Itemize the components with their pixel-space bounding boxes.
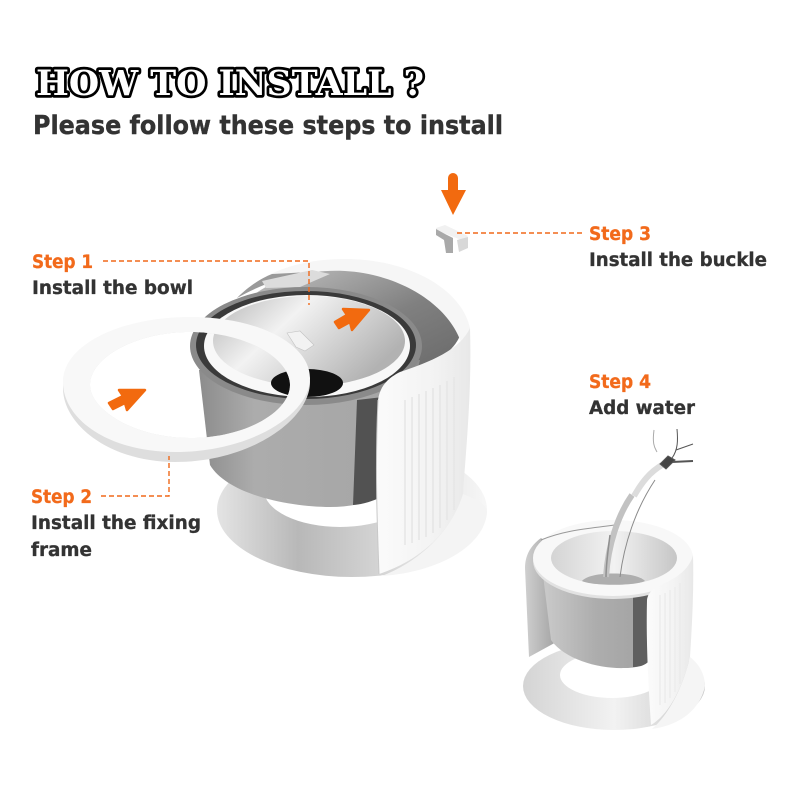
- funnel: [213, 296, 405, 386]
- step 3 label: [589, 224, 767, 271]
- step 2 label: [31, 487, 201, 561]
- step 3 label: Step 3: [589, 224, 651, 245]
- small bowl dark side: [633, 590, 648, 667]
- step 3 label: Install the buckle: [589, 250, 767, 271]
- dark gap: [196, 291, 416, 399]
- bowl rim: [190, 287, 422, 405]
- step 3 leader line: [457, 232, 582, 234]
- step 1 label: Install the bowl: [32, 278, 193, 299]
- step 2 leader line: [101, 456, 169, 496]
- small back shell: [525, 538, 570, 657]
- back shell: [236, 259, 470, 381]
- panel base wedge: [382, 494, 487, 576]
- main device illustration: [190, 259, 487, 577]
- step 4 label: Add water: [589, 398, 696, 419]
- bowl dark side: [353, 395, 400, 505]
- drain hole: [271, 369, 343, 397]
- funnel lip: [204, 295, 410, 397]
- step 1 label: [32, 252, 193, 299]
- tab: [287, 331, 314, 351]
- arrow: bowl: [335, 309, 369, 330]
- step 2 label: Install the fixing: [31, 513, 201, 534]
- arrow: buckle: [441, 173, 466, 215]
- small bowl interior: [551, 531, 677, 585]
- small rim: [533, 520, 693, 599]
- water pool: [582, 574, 645, 585]
- step 1 label: Step 1: [32, 252, 93, 273]
- step 4 label: Step 4: [589, 372, 651, 393]
- step 1 leader line: [103, 261, 309, 305]
- step 4 label: [589, 372, 696, 419]
- front panel: [376, 328, 470, 574]
- title: HOW TO INSTALL ?: [36, 63, 424, 104]
- step 2 label: Step 2: [31, 487, 92, 508]
- small device with water: [523, 429, 705, 730]
- base plate: [217, 443, 487, 577]
- small bowl body: [543, 575, 660, 668]
- small front panel: [647, 555, 693, 725]
- arrow: frame: [109, 390, 145, 410]
- small panel base wedge: [652, 657, 705, 729]
- faucet detail: [653, 429, 693, 469]
- small base: [523, 642, 705, 730]
- bowl body: [199, 360, 420, 507]
- water stream: [606, 465, 662, 577]
- subtitle: Please follow these steps to install: [33, 111, 503, 141]
- step 2 label: frame: [31, 540, 92, 561]
- fixing frame ring: [63, 317, 310, 462]
- buckle part: [436, 225, 468, 253]
